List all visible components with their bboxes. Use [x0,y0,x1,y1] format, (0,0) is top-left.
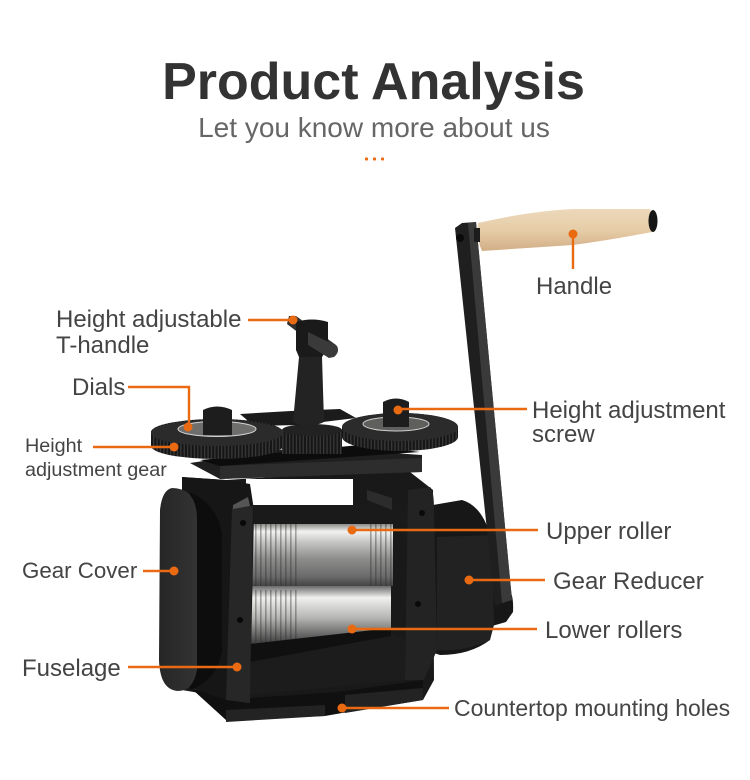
flat plate [240,409,356,426]
label: Lower rollers: Lower rollers [545,617,682,644]
label: Height adjustment gear [25,435,178,481]
label: Height adjustment gear: Height [25,435,83,457]
label: Handle: Handle [536,273,612,300]
gear reducer housing [425,500,513,655]
label: Height adjustable T-handle [56,306,298,359]
base interior [250,632,405,695]
T-handle [287,316,338,426]
title: Product Analysis [162,53,585,111]
left gear with dial [151,419,283,459]
crank arm [455,222,512,606]
base plate [193,680,423,720]
subtitle: Let you know more about us [198,112,550,143]
label: Height adjustable T-handle: Height adjustable [56,306,241,333]
label: Lower rollers [348,617,682,644]
label: Upper roller: Upper roller [546,518,671,545]
label: Gear Reducer [464,568,704,595]
label: Gear Cover: Gear Cover [22,558,138,583]
centre gear [282,424,342,454]
right knob [383,398,409,427]
label: Fuselage: Fuselage [22,655,121,682]
label: Height adjustment screw: Height adjustment [532,397,726,424]
machine illustration [151,209,658,722]
wooden handle grip [478,209,653,251]
label: Dials [72,374,192,432]
right frame post [405,487,437,680]
roller bay [252,505,410,525]
left knob [203,406,232,435]
upper roller [252,524,393,586]
label: Handle [536,230,612,300]
label: Fuselage [22,655,242,682]
label: Height adjustment screw [394,397,726,448]
label: Dials: Dials [72,374,125,401]
label: Upper roller [348,518,671,545]
decorative orange dots [365,157,384,161]
right gear with dial [342,413,458,451]
frame back and top [182,472,434,700]
lower roller [251,586,391,644]
label: Height adjustable T-handle: T-handle [56,332,149,359]
top mounting plate [190,447,422,479]
label: Height adjustment gear: adjustment gear [25,459,167,481]
label: Countertop mounting holes: Countertop mounting holes [454,695,730,721]
gear cover [159,488,222,691]
left frame post [182,477,254,703]
label: Gear Reducer: Gear Reducer [553,568,704,595]
label: Height adjustment screw: screw [532,421,595,448]
